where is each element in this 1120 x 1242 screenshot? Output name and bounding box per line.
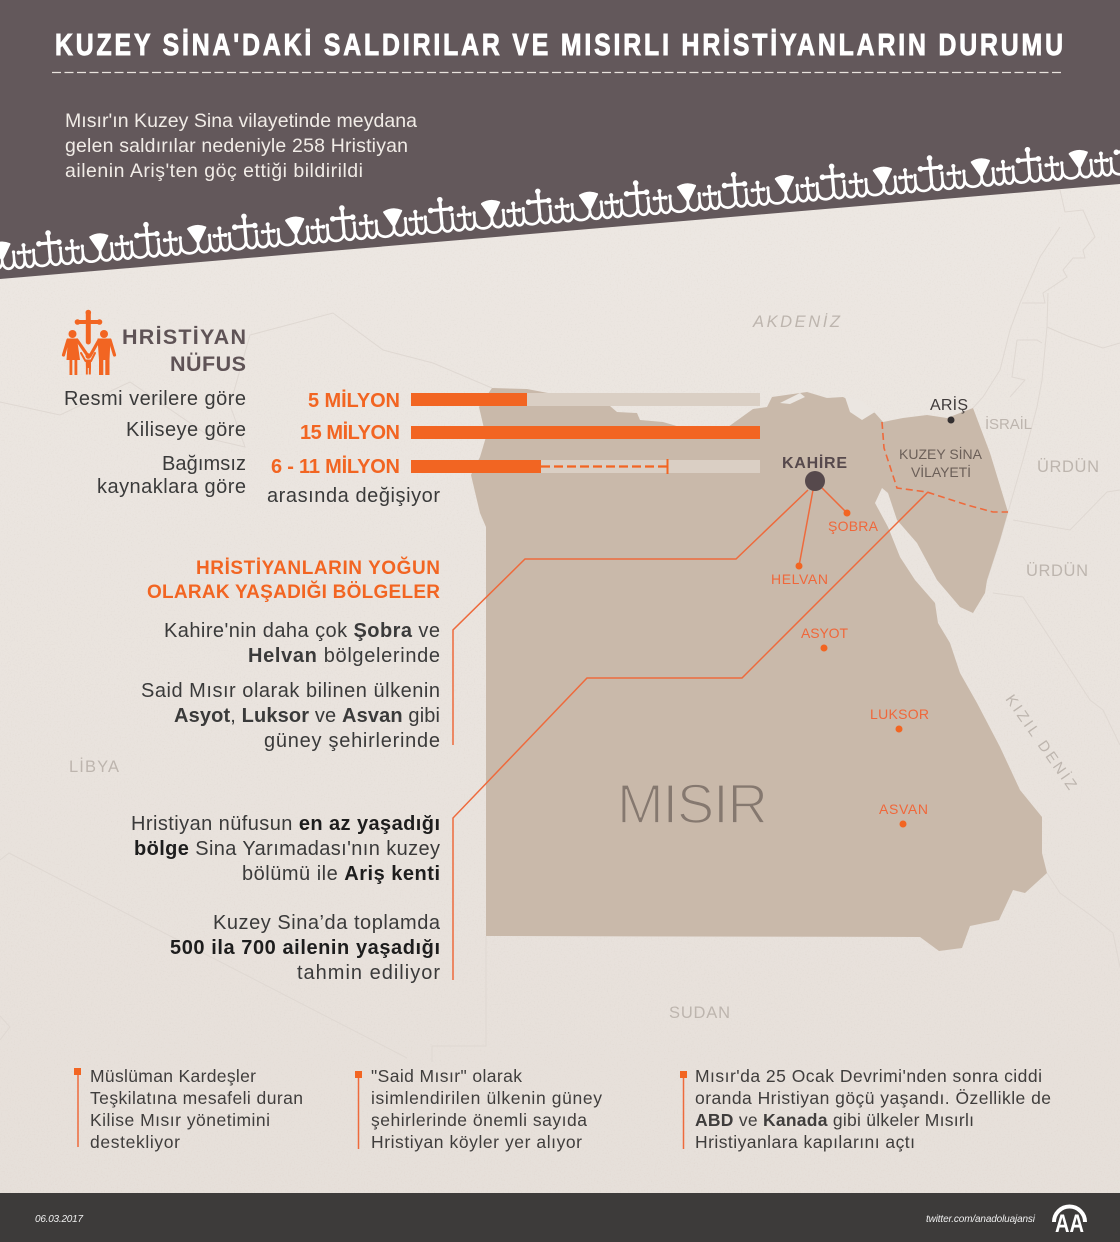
heading: regions: HRİSTİYANLARIN YOĞUN — [196, 557, 440, 579]
map labels: seas and countries: ÜRDÜN — [1037, 458, 1099, 476]
text block: North Sinai families: Kuzey Sina’da toplamda — [213, 912, 441, 934]
text block: least populated region: bölge Sina Yarımadası'nın kuzey — [134, 838, 440, 860]
footnote: Muslim Brotherhood: Teşkilatına mesafeli duran — [90, 1088, 303, 1108]
text block: North Sinai families — [170, 912, 441, 984]
text block: least populated region: bölümü ile Ariş kenti — [242, 863, 440, 885]
population values: 15 MİLYON — [300, 421, 400, 444]
map: neighbouring country borders — [0, 190, 1120, 1062]
map marker: Kahire with districts: HELVAN — [771, 571, 828, 587]
heading: regions — [147, 557, 440, 603]
footnote: 25 January Revolution: oranda Hristiyan göçü yaşandı. Özellikle de — [695, 1088, 1051, 1108]
map marker: Kahire with districts — [771, 454, 879, 587]
intro text: gelen saldırılar nedeniyle 258 Hristiyan — [65, 135, 408, 157]
text block: Cairo and Upper Egypt: Said Mısır olarak bilinen ülkenin — [141, 680, 440, 702]
footnote: 25 January Revolution: Mısır'da 25 Ocak Devrimi'nden sonra ciddi — [695, 1066, 1042, 1086]
heading: Hristiyan nüfus — [122, 325, 246, 376]
map labels: seas and countries — [69, 312, 1099, 1022]
text block: Cairo and Upper Egypt — [141, 620, 440, 752]
population values — [271, 389, 400, 478]
source labels: Bağımsız — [162, 453, 246, 475]
map label: Kuzey Sina Vilayeti: KUZEY SİNA — [899, 445, 983, 462]
title: KUZEY SİNA'DAKİ SALDIRILAR VE MISIRLI HRİSTİYANLARIN DURUMU — [55, 27, 1063, 62]
text block: least populated region — [131, 813, 440, 885]
footnote: Muslim Brotherhood: destekliyor — [90, 1132, 180, 1152]
cross and fan garland — [0, 134, 1120, 278]
population values: 6 - 11 MİLYON — [271, 455, 400, 478]
footnote: Said Mısır — [355, 1066, 602, 1152]
map marker: Asyot: ASYOT — [801, 625, 848, 641]
map labels: seas and countries: LİBYA — [69, 757, 119, 776]
source labels: Resmi verilere göre — [64, 388, 246, 410]
map marker: Ariş — [930, 395, 968, 424]
text block: Cairo and Upper Egypt: Helvan bölgelerinde — [248, 645, 440, 667]
footnote: Muslim Brotherhood: Kilise Mısır yönetimini — [90, 1110, 270, 1130]
footnote: Muslim Brotherhood: Müslüman Kardeşler — [90, 1066, 256, 1086]
footnote: 25 January Revolution — [680, 1066, 1051, 1152]
heading: Hristiyan nüfus: HRİSTİYAN — [122, 325, 246, 349]
text block: Cairo and Upper Egypt: Kahire'nin daha çok Şobra ve — [164, 620, 440, 642]
text block: North Sinai families: 500 ila 700 ailenin yaşadığı — [170, 937, 440, 959]
footnote: Said Mısır: "Said Mısır" olarak — [371, 1066, 522, 1086]
note: range: arasında değişiyor — [267, 485, 440, 507]
map marker: Asvan — [879, 801, 928, 828]
map label: Kuzey Sina Vilayeti: VİLAYETİ — [911, 463, 971, 480]
connector: Cairo regions — [453, 490, 808, 745]
intro text: ailenin Ariş'ten göç ettiği bildirildi — [65, 160, 363, 182]
source labels — [64, 388, 246, 498]
map marker: Kahire with districts: ŞOBRA — [828, 518, 879, 534]
map labels: seas and countries: KIZIL DENİZ — [1002, 691, 1081, 793]
header band — [0, 0, 1120, 279]
footnote: Muslim Brotherhood — [74, 1066, 303, 1152]
map labels: seas and countries: AKDENİZ — [752, 312, 841, 331]
map marker: Asvan: ASVAN — [879, 801, 928, 817]
map labels: seas and countries: İSRAİL — [985, 415, 1032, 433]
map marker: Asyot — [801, 625, 848, 652]
text block: Cairo and Upper Egypt: Asyot, Luksor ve Asvan gibi — [174, 705, 440, 727]
footer bar — [0, 1193, 1120, 1242]
text block: least populated region: Hristiyan nüfusun en az yaşadığı — [131, 813, 440, 835]
bar chart: population estimates — [411, 393, 760, 474]
map: Nile delta lakes — [780, 393, 875, 420]
date: 06.03.2017 — [35, 1214, 83, 1225]
map marker: Luksor — [870, 706, 929, 732]
map label: Mısır: MISIR — [617, 772, 768, 835]
map label: Kuzey Sina Vilayeti — [899, 445, 983, 480]
footnote: 25 January Revolution: ABD ve Kanada gibi ülkeler Mısırlı — [695, 1110, 974, 1130]
source labels: kaynaklara göre — [97, 476, 246, 498]
footnote: Said Mısır: isimlendirilen ülkenin güney — [371, 1088, 602, 1108]
footnote: Said Mısır: Hristiyan köyler yer alıyor — [371, 1132, 582, 1152]
population values: 5 MİLYON — [308, 389, 400, 412]
heading: Hristiyan nüfus: NÜFUS — [170, 351, 246, 376]
intro text: Mısır'ın Kuzey Sina vilayetinde meydana — [65, 110, 417, 132]
text block: North Sinai families: tahmin ediliyor — [297, 962, 440, 984]
text block: Cairo and Upper Egypt: güney şehirlerinde — [264, 730, 440, 752]
map labels: seas and countries: SUDAN — [669, 1004, 730, 1022]
map marker: Luksor: LUKSOR — [870, 706, 929, 722]
twitter handle: twitter.com/anadoluajansi — [926, 1214, 1036, 1225]
source labels: Kiliseye göre — [126, 419, 246, 441]
connector: North Sinai — [453, 492, 928, 980]
footnote: Said Mısır: şehirlerinde önemli sayıda — [371, 1110, 587, 1130]
map: Egypt — [471, 388, 1047, 951]
footnote: 25 January Revolution: Hristiyanlara kapılarını açtı — [695, 1132, 915, 1152]
map marker: Kahire with districts: KAHİRE — [782, 454, 847, 472]
heading: regions: OLARAK YAŞADIĞI BÖLGELER — [147, 581, 440, 603]
map labels: seas and countries: ÜRDÜN — [1026, 562, 1088, 580]
intro text — [65, 110, 417, 182]
North Sinai province border — [882, 422, 1008, 512]
icon: family and cross — [64, 310, 114, 375]
map marker: Ariş: ARİŞ — [930, 395, 968, 414]
logo: Anadolu Agency: AA — [1055, 1210, 1084, 1238]
